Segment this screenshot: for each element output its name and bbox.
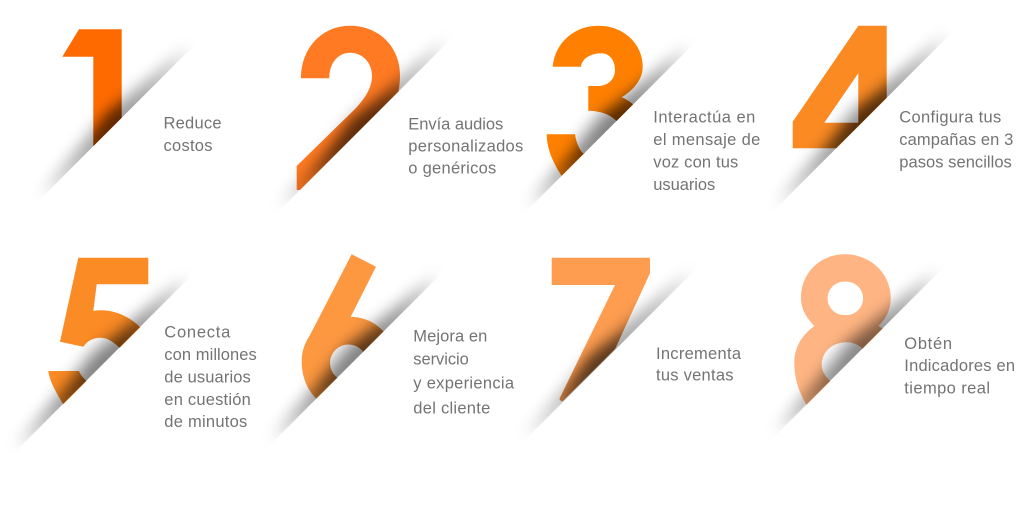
numeral shading 6 bbox=[311, 324, 384, 398]
text: obten: Indicadores en bbox=[904, 357, 1015, 375]
panel: step 5 connect bbox=[18, 258, 256, 446]
numeral shading 3 bbox=[562, 88, 633, 173]
numeral shading 5 bbox=[59, 321, 140, 404]
fold shadow 1 bbox=[44, 50, 187, 192]
text: conecta: Conecta bbox=[164, 324, 231, 342]
text: reduce costos: Reduce bbox=[164, 114, 222, 132]
text: reduce costos bbox=[164, 114, 222, 155]
numeral 6 bbox=[302, 254, 384, 399]
text: configura: pasos sencillos bbox=[899, 153, 1012, 171]
text: reduce costos: costos bbox=[164, 137, 212, 155]
text: conecta: de minutos bbox=[164, 413, 247, 431]
numeral shading 2 bbox=[310, 80, 400, 177]
panel: step 3 interact bbox=[530, 26, 760, 204]
text: conecta: en cuestión bbox=[164, 391, 251, 409]
panel: step 2 audios bbox=[284, 26, 523, 204]
text: conecta bbox=[164, 324, 257, 431]
text: interactua: el mensaje de bbox=[653, 131, 760, 149]
panel: step 7 sales bbox=[529, 258, 742, 433]
text: conecta: de usuarios bbox=[164, 368, 251, 386]
fold shadow 4 bbox=[780, 37, 944, 202]
numeral 7 bbox=[552, 258, 650, 402]
fold shadow 7 bbox=[529, 274, 688, 433]
text: incrementa: tus ventas bbox=[656, 367, 734, 385]
fold shadow 2 bbox=[284, 44, 444, 204]
numeral 2 bbox=[297, 26, 400, 190]
fold shadow 5 bbox=[18, 278, 186, 446]
numeral shading 7 bbox=[560, 324, 626, 402]
text: mejora bbox=[413, 328, 515, 417]
text: envia audios bbox=[408, 115, 523, 177]
text: interactua: Interactúa en bbox=[653, 109, 755, 127]
text: envia audios: personalizados bbox=[408, 138, 523, 156]
text: incrementa bbox=[656, 345, 742, 385]
text: mejora: del cliente bbox=[413, 399, 490, 417]
text: mejora: y experiencia bbox=[413, 374, 515, 392]
text: configura: campañas en 3 bbox=[899, 131, 1013, 149]
text: envia audios: o genéricos bbox=[408, 159, 496, 177]
numeral shading 1 bbox=[93, 94, 122, 146]
text: incrementa: Incrementa bbox=[656, 345, 742, 363]
text: configura: Configura tus bbox=[899, 109, 1001, 127]
numeral 8 bbox=[794, 254, 891, 405]
text: interactua: usuarios bbox=[653, 176, 715, 194]
fold shadow 6 bbox=[274, 276, 436, 438]
numeral shading 4 bbox=[820, 80, 887, 148]
numeral 3 bbox=[547, 26, 650, 180]
fold shadow 3 bbox=[530, 48, 686, 204]
panel: step 1 reduce costs bbox=[44, 29, 221, 192]
text: mejora: Mejora en bbox=[413, 328, 487, 346]
text: obten: Obtén bbox=[904, 335, 952, 353]
panel: step 8 indicators bbox=[778, 254, 1014, 430]
numeral 1 bbox=[62, 29, 122, 160]
text: conecta: con millones bbox=[164, 346, 257, 364]
numeral 4 bbox=[793, 26, 887, 148]
panel: step 4 campaigns bbox=[780, 26, 1013, 202]
numeral 5 bbox=[48, 258, 148, 404]
text: obten: tiempo real bbox=[904, 379, 990, 397]
numeral shading 8 bbox=[823, 320, 883, 386]
text: interactua: voz con tus bbox=[653, 153, 738, 171]
text: envia audios: Envía audios bbox=[408, 115, 503, 133]
text: configura bbox=[899, 109, 1013, 171]
text: mejora: servicio bbox=[413, 350, 469, 368]
text: interactua bbox=[653, 109, 760, 194]
text: obten bbox=[904, 335, 1015, 397]
panel: step 6 service bbox=[274, 254, 514, 438]
fold shadow 8 bbox=[778, 273, 935, 430]
